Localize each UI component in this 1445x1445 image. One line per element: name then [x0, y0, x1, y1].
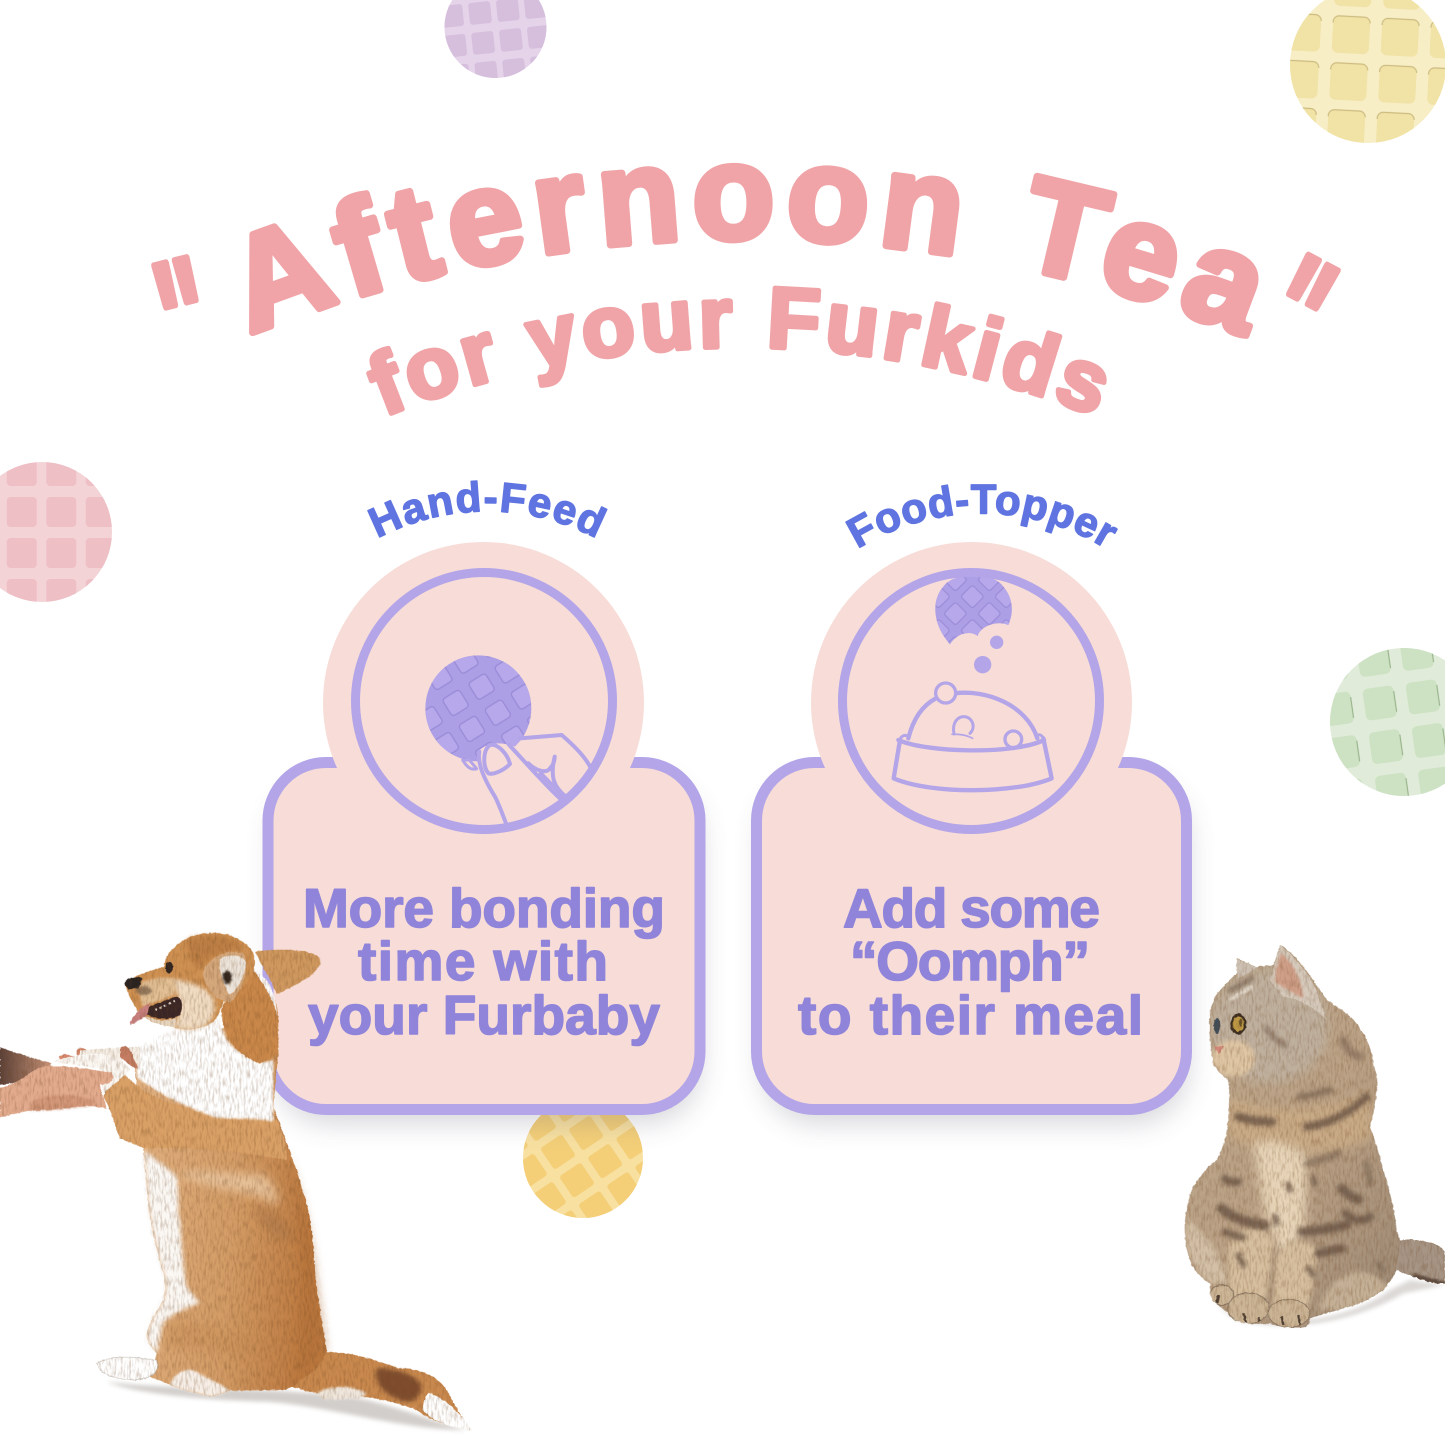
tail dark patch — [376, 1368, 422, 1401]
far arm (human) — [0, 1047, 52, 1085]
panel top circle — [811, 542, 1132, 863]
panel text: your Furbaby — [308, 984, 660, 1046]
far eye — [1214, 1018, 1220, 1034]
panel text: “Oomph” — [850, 930, 1090, 992]
hand shading — [28, 1095, 97, 1111]
near hand (human) — [0, 1066, 113, 1117]
photo: tabby cat — [1184, 945, 1445, 1328]
icon ring — [842, 572, 1100, 830]
haunch shading — [167, 1320, 267, 1353]
panel text — [798, 877, 1143, 1046]
cheek — [170, 978, 215, 1030]
treat — [425, 655, 531, 761]
bitten treat — [935, 575, 1012, 644]
head fur — [1212, 970, 1328, 1083]
title: Afternoon Tea — [249, 162, 1258, 339]
near ear inner pink — [1275, 953, 1303, 998]
toe lines — [1217, 1295, 1300, 1325]
paw top — [80, 1047, 140, 1063]
dog front arm — [103, 1067, 287, 1160]
cookie: lilac waffle — [444, 0, 546, 78]
bowl with food — [894, 683, 1052, 790]
legs light fur — [1228, 1228, 1317, 1310]
near ear inner — [220, 955, 246, 995]
panel shadow — [760, 780, 1190, 1125]
chest light fur — [1253, 1141, 1307, 1257]
lower jaw — [143, 1015, 177, 1027]
ear shadow — [223, 971, 232, 984]
muzzle — [1212, 1040, 1255, 1077]
cat nose — [1214, 1046, 1224, 1054]
panel shadow — [272, 780, 702, 1125]
muzzle top — [139, 978, 176, 1007]
dog ground shadow — [107, 1382, 467, 1430]
panel text: time with — [358, 930, 608, 992]
cat photo clip — [1184, 945, 1445, 1328]
tail white underside — [317, 1387, 367, 1400]
teeth — [155, 1001, 175, 1010]
head — [125, 933, 255, 1029]
paws — [1210, 1285, 1310, 1327]
near ear — [203, 952, 246, 1003]
right flank — [1317, 1272, 1390, 1310]
thumb — [120, 1046, 138, 1069]
left flank — [1185, 1220, 1228, 1283]
haunch white — [170, 1370, 230, 1397]
body pale band — [177, 1171, 278, 1207]
body dark shading — [253, 1207, 293, 1240]
near eye — [1230, 1014, 1246, 1034]
hind foot — [97, 1357, 158, 1380]
tail tip — [423, 1393, 472, 1430]
cookie: golden waffle — [523, 1098, 643, 1218]
chest white — [137, 1017, 273, 1122]
icon: treat over bowl — [894, 575, 1052, 790]
far ear — [255, 950, 321, 994]
cookie: green waffle — [1330, 648, 1445, 796]
dark stripes — [1222, 978, 1383, 1275]
body — [133, 1013, 327, 1397]
tongue — [130, 1003, 150, 1025]
icon: hand holding treat — [425, 655, 592, 827]
cookie: cream waffle — [1290, 0, 1445, 143]
crumbs — [974, 636, 1003, 673]
body belly white — [143, 1150, 200, 1353]
subtitle: for your Furkids — [366, 286, 1107, 416]
near eye iris — [1233, 1016, 1244, 1032]
panel text — [303, 877, 665, 1046]
panel text: Add some — [843, 877, 1100, 939]
forehead stripes — [1230, 987, 1253, 1000]
panel body — [756, 762, 1186, 1110]
body fill — [1184, 945, 1445, 1328]
pupil — [1239, 1019, 1242, 1027]
panel top circle — [323, 542, 644, 863]
hand — [463, 735, 592, 827]
tail dark end — [1412, 1272, 1445, 1284]
panel: food-topper — [750, 484, 1200, 1134]
panel body — [268, 762, 700, 1110]
panel text: to their meal — [798, 984, 1143, 1046]
label: food-topper: Food-Topper — [845, 484, 1118, 548]
brow darker fur — [187, 936, 243, 970]
back shading — [287, 1153, 326, 1380]
fingertips — [59, 1048, 92, 1059]
far ear — [1235, 958, 1258, 978]
panel text: More bonding — [303, 877, 665, 939]
icon ring — [356, 572, 612, 830]
panel: hand-feed — [262, 480, 712, 1134]
title: opening quote: " — [138, 220, 231, 417]
dog paw — [53, 1055, 130, 1093]
tail — [1397, 1240, 1445, 1285]
title: closing quote: " — [1229, 219, 1362, 410]
eye — [165, 962, 173, 973]
nose — [124, 977, 143, 989]
cookie: pink waffle — [0, 462, 112, 602]
near ear — [1270, 945, 1327, 1020]
tail — [290, 1352, 472, 1430]
muzzle whisker shade — [136, 986, 152, 995]
neck white stripe — [253, 970, 277, 1017]
mouth — [143, 997, 182, 1019]
photo: corgi with human hands — [0, 933, 472, 1430]
cat ground shadow — [1213, 1280, 1445, 1326]
neck warm fur — [1226, 1096, 1373, 1152]
neck fur — [222, 970, 278, 1063]
label: hand-feed: Hand-Feed — [367, 480, 608, 538]
